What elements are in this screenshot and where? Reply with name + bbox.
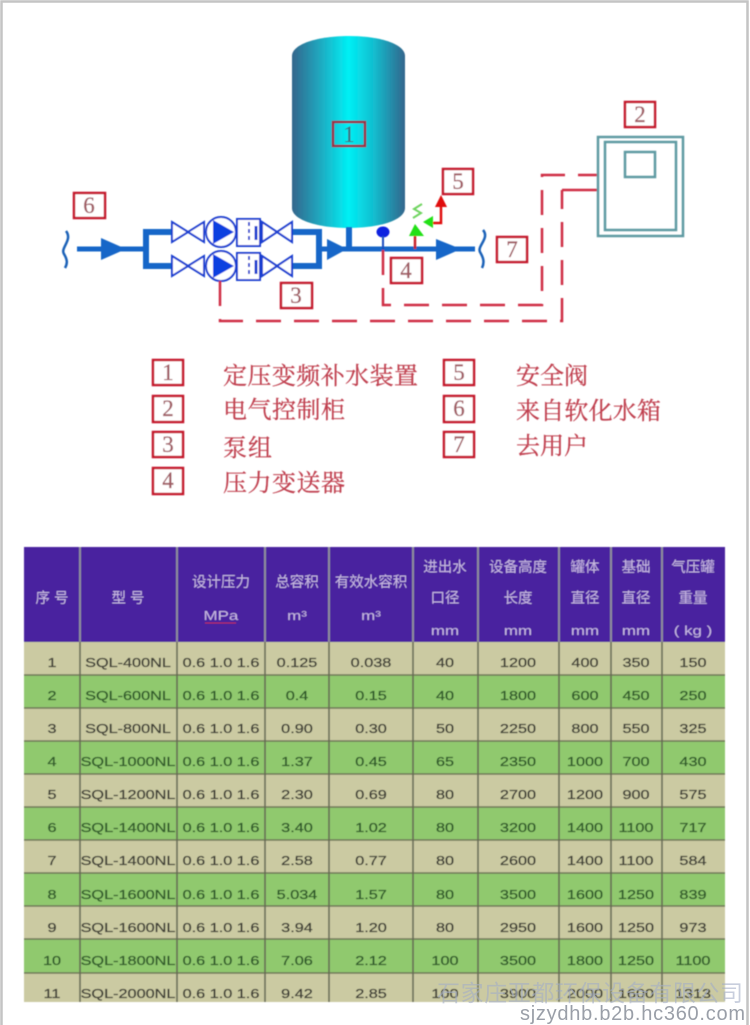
row 3: 0.30 — [355, 722, 387, 737]
row 4: 65 — [436, 755, 454, 770]
label 1: 1 — [343, 122, 355, 147]
row 3: 0.90 — [281, 722, 313, 737]
row 9: 80 — [436, 921, 454, 936]
row 1: SQL-400NL — [85, 656, 171, 671]
row 11: 1313 — [675, 987, 711, 1002]
row 4: 0.45 — [355, 755, 387, 770]
legend item 2 — [153, 396, 345, 424]
row 5: 5 — [47, 788, 57, 803]
row 6: 1400 — [567, 821, 603, 836]
row 10: 3500 — [500, 954, 536, 969]
row 6 — [47, 821, 707, 836]
row 3: SQL-800NL — [85, 722, 171, 737]
label 5 — [443, 169, 473, 194]
icon: safety valve — [409, 195, 447, 249]
row 11: 9.42 — [281, 987, 313, 1002]
table header: 直径 — [570, 590, 600, 607]
lower pump line — [172, 251, 292, 281]
watermark — [437, 980, 745, 1025]
row 8 — [47, 888, 707, 903]
row 7: 1400 — [567, 854, 603, 869]
row 7: 0.77 — [355, 854, 387, 869]
row 5: 1200 — [567, 788, 603, 803]
watermark web address: sjzydhb.b2b.hc360.com — [520, 1003, 745, 1025]
row 9: 0.6 1.0 1.6 — [183, 921, 259, 936]
row 4: 1.37 — [281, 755, 313, 770]
row 5: 0.6 1.0 1.6 — [183, 788, 259, 803]
row 2: SQL-600NL — [85, 689, 171, 704]
row 3: 550 — [622, 722, 650, 737]
row 1: 1 — [47, 656, 57, 671]
legend item 4: 压力变送器 — [223, 470, 345, 497]
row 3: 325 — [679, 722, 707, 737]
label 2: 2 — [634, 102, 646, 127]
row 11: 2000 — [567, 987, 603, 1002]
table header: 总容积 — [275, 574, 319, 591]
row 10: 1250 — [618, 954, 654, 969]
legend item 7: 7 — [453, 432, 465, 457]
row 3: 0.6 1.0 1.6 — [183, 722, 259, 737]
label 5: 5 — [452, 169, 464, 194]
legend item 3 — [153, 432, 272, 462]
row 5: SQL-1200NL — [81, 788, 175, 803]
legend item 4 — [153, 468, 345, 497]
row 1: 400 — [571, 656, 599, 671]
table header: 进出水 — [423, 559, 467, 576]
row 6: 1.02 — [355, 821, 387, 836]
row 7: 2.58 — [281, 854, 313, 869]
label 7 — [497, 237, 527, 262]
legend item 6 — [444, 396, 661, 425]
row 2: 2 — [47, 689, 57, 704]
row 10: 0.6 1.0 1.6 — [183, 954, 259, 969]
row 9: 3.94 — [281, 921, 313, 936]
row 9: 1600 — [567, 921, 603, 936]
table header: 重量 — [678, 590, 708, 607]
legend item 7 — [444, 432, 588, 460]
table header: 有效水容积 — [335, 574, 407, 591]
signal line: transmitter to cabinet — [383, 175, 598, 305]
row 8: 1600 — [567, 888, 603, 903]
table header: MPa — [204, 609, 239, 623]
row 11: 3900 — [500, 987, 536, 1002]
legend item 3: 泵组 — [223, 435, 272, 462]
table header: 口径 — [430, 590, 460, 607]
table header: 基础 — [622, 559, 650, 576]
legend item 1: 1 — [162, 360, 174, 385]
row 8: 1.57 — [355, 888, 387, 903]
row 6: 3200 — [500, 821, 536, 836]
signal line: pump to cabinet — [220, 190, 598, 321]
row 2: 1800 — [500, 689, 536, 704]
table header: 设备高度 — [489, 559, 547, 576]
watermark company name: 石家庄亚都环保设备有限公司 — [437, 980, 743, 1006]
row 10 — [43, 954, 710, 969]
row 8: 1250 — [618, 888, 654, 903]
row 11: SQL-2000NL — [81, 987, 175, 1002]
row 7 — [47, 854, 707, 869]
row 7: 584 — [679, 854, 707, 869]
row 1: 40 — [436, 656, 454, 671]
table header: 长度 — [504, 590, 532, 607]
row 9 — [47, 921, 707, 936]
table header: m³ — [287, 609, 307, 623]
row 9: 973 — [679, 921, 707, 936]
row 7: 2600 — [500, 854, 536, 869]
row 7: 1100 — [619, 854, 653, 869]
outlet pipe with arrows — [320, 227, 475, 260]
label 2 — [625, 102, 655, 127]
row 8: 0.6 1.0 1.6 — [183, 888, 259, 903]
legend item 5: 5 — [453, 360, 465, 385]
row 5: 900 — [622, 788, 650, 803]
row 5: 2.30 — [281, 788, 313, 803]
row 10: 100 — [431, 954, 459, 969]
upper pump line — [172, 217, 292, 247]
row 5: 0.69 — [355, 788, 387, 803]
row 11: 0.6 1.0 1.6 — [183, 987, 259, 1002]
row 3: 3 — [47, 722, 57, 737]
table header: 型 号 — [111, 590, 145, 607]
row 1 — [47, 656, 707, 671]
row 10: 7.06 — [281, 954, 313, 969]
row 11 — [44, 987, 711, 1002]
label 4 — [391, 258, 422, 283]
table header: 序 号 — [35, 590, 69, 607]
row 1: 1200 — [500, 656, 536, 671]
row 2: 0.15 — [355, 689, 387, 704]
legend — [153, 360, 661, 497]
row 11: 11 — [44, 987, 60, 1002]
row 4: 700 — [622, 755, 650, 770]
row 2: 0.4 — [286, 689, 308, 704]
row 3: 800 — [571, 722, 599, 737]
row 10: 2.12 — [355, 954, 387, 969]
table header: ( kg ) — [674, 624, 712, 638]
row 4: 0.6 1.0 1.6 — [183, 755, 259, 770]
table header: m³ — [361, 609, 381, 623]
legend item 4: 4 — [162, 468, 174, 493]
row 6: SQL-1400NL — [81, 821, 175, 836]
outlet wave mark — [480, 230, 485, 268]
row 1: 0.125 — [277, 656, 317, 671]
legend item 6: 来自软化水箱 — [516, 398, 661, 425]
table header: mm — [571, 624, 599, 638]
table header: 设计压力 — [192, 574, 250, 591]
pump group manifold — [146, 232, 319, 266]
legend item 6: 6 — [453, 396, 465, 421]
row 5: 2700 — [500, 788, 536, 803]
specification table — [24, 547, 725, 1002]
row 2: 600 — [571, 689, 599, 704]
legend item 1: 定压变频补水装置 — [223, 363, 418, 390]
row 9: SQL-1600NL — [81, 921, 175, 936]
label 3: 3 — [290, 283, 302, 308]
row 4: 430 — [679, 755, 707, 770]
label 6: 6 — [83, 193, 95, 218]
row 10: SQL-1800NL — [81, 954, 175, 969]
row 10: 1100 — [676, 954, 710, 969]
row 6: 6 — [47, 821, 57, 836]
label 1 — [333, 122, 365, 147]
row 1: 0.6 1.0 1.6 — [183, 656, 259, 671]
label 7: 7 — [506, 237, 518, 262]
table header: 直径 — [622, 590, 650, 607]
inlet wave mark — [63, 231, 68, 268]
row 2 — [47, 689, 707, 704]
row 6: 717 — [679, 821, 707, 836]
row 6: 3.40 — [281, 821, 313, 836]
row 10: 10 — [43, 954, 61, 969]
row 8: SQL-1600NL — [81, 888, 175, 903]
row 2: 0.6 1.0 1.6 — [183, 689, 259, 704]
row 6: 80 — [436, 821, 454, 836]
row 8: 8 — [47, 888, 57, 903]
row 9: 2950 — [500, 921, 536, 936]
row 8: 839 — [679, 888, 707, 903]
row 7: SQL-1400NL — [81, 854, 175, 869]
row 3 — [47, 722, 707, 737]
row 6: 0.6 1.0 1.6 — [183, 821, 259, 836]
row 2: 40 — [436, 689, 454, 704]
row 8: 3500 — [500, 888, 536, 903]
process diagram — [63, 36, 683, 321]
label 6 — [74, 193, 105, 218]
row 11: 1600 — [618, 987, 654, 1002]
row 4: 4 — [47, 755, 57, 770]
row 8: 80 — [436, 888, 454, 903]
row 11: 100 — [431, 987, 459, 1002]
table header: mm — [431, 624, 459, 638]
row 6: 1100 — [619, 821, 653, 836]
legend item 2: 电气控制柜 — [223, 397, 345, 424]
row 5 — [47, 788, 707, 803]
legend item 1 — [153, 360, 418, 390]
label 4: 4 — [400, 258, 412, 283]
row 7: 7 — [47, 854, 57, 869]
legend item 5 — [444, 360, 588, 390]
table header: mm — [504, 624, 532, 638]
row 1: 0.038 — [351, 656, 391, 671]
row 11: 2.85 — [355, 987, 387, 1002]
pressure transmitter — [376, 226, 390, 250]
inlet pipe with arrow — [77, 238, 145, 260]
electrical cabinet — [598, 137, 683, 236]
row 8: 5.034 — [277, 888, 317, 903]
table header: 罐体 — [570, 559, 600, 576]
table header: mm — [622, 624, 650, 638]
row 9: 9 — [47, 921, 57, 936]
row backgrounds — [24, 642, 725, 1002]
row 2: 450 — [622, 689, 650, 704]
row 3: 50 — [436, 722, 454, 737]
label 3 — [281, 283, 312, 308]
legend item 2: 2 — [162, 396, 174, 421]
row 9: 1250 — [618, 921, 654, 936]
row 2: 250 — [679, 689, 707, 704]
legend item 3: 3 — [162, 432, 174, 457]
row 5: 80 — [436, 788, 454, 803]
row 3: 2250 — [500, 722, 536, 737]
row 4 — [47, 755, 707, 770]
table header — [24, 547, 725, 642]
row 4: 1000 — [567, 755, 603, 770]
row 10: 1800 — [567, 954, 603, 969]
row 4: SQL-1000NL — [81, 755, 175, 770]
row 1: 150 — [679, 656, 707, 671]
row 7: 0.6 1.0 1.6 — [183, 854, 259, 869]
row 7: 80 — [436, 854, 454, 869]
row 9: 1.20 — [355, 921, 387, 936]
tank: constant-pressure unit — [292, 36, 405, 228]
legend item 5: 安全阀 — [516, 363, 588, 390]
row 1: 350 — [622, 656, 650, 671]
table header: 气压罐 — [671, 559, 715, 576]
legend item 7: 去用户 — [516, 433, 588, 460]
row 4: 2350 — [500, 755, 536, 770]
row 5: 575 — [679, 788, 707, 803]
